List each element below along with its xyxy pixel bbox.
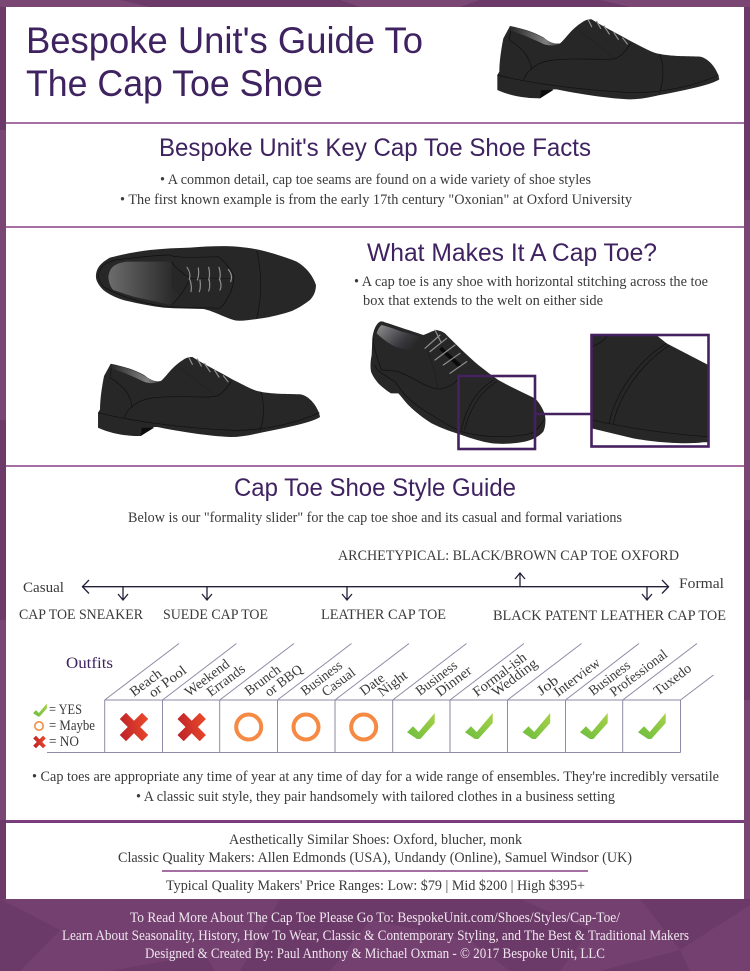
column labels xyxy=(127,647,695,701)
column labels: Tuxedo xyxy=(651,661,695,699)
column labels: Beach xyxy=(127,667,165,700)
column labels: Job xyxy=(534,673,562,699)
text: cap toe definition xyxy=(354,274,708,309)
panel: what makes it a cap toe xyxy=(6,226,744,465)
title: The Cap Toe Shoe xyxy=(26,63,323,104)
text: price ranges: Typical Quality Makers' Price Ranges: Low: $79 | Mid $200 | High $395+ xyxy=(166,878,585,894)
column labels: Wedding xyxy=(489,656,541,700)
icon: magnified toe xyxy=(592,335,708,443)
ratings icons xyxy=(120,713,666,740)
text: cap toe definition: • A cap toe is any shoe with horizontal stitching across the toe xyxy=(354,274,708,290)
text: versatility bullets xyxy=(32,769,719,805)
chart: formality slider: LEATHER CAP TOE xyxy=(321,607,446,623)
text: facts bullets: • The first known example is from the early 17th century "Oxonian" at Oxford University xyxy=(120,192,633,208)
panel: similar shoes and prices xyxy=(6,820,744,899)
column labels: Brunch xyxy=(242,663,284,699)
text: facts bullets xyxy=(120,172,633,208)
column labels: Professional xyxy=(607,647,671,700)
text: similar shoes and makers: Aesthetically Similar Shoes: Oxford, blucher, monk xyxy=(229,832,523,848)
title: Bespoke Unit's Guide To xyxy=(26,20,423,61)
heading: style guide: Cap Toe Shoe Style Guide xyxy=(234,474,516,502)
chart: outfit table xyxy=(47,644,714,752)
column labels: Formal-ish xyxy=(470,650,530,700)
footer: To Read More About The Cap Toe Please Go To: BespokeUnit.com/Shoes/Styles/Cap-Toe/ xyxy=(130,910,621,926)
panel: style guide xyxy=(6,465,744,821)
footer: Learn About Seasonality, History, How To Wear, Classic & Contemporary Styling, and The Best & Traditional Makers xyxy=(62,928,689,944)
text: style guide intro: Below is our "formality slider" for the cap toe shoe and its casual and formal variations xyxy=(128,510,622,526)
panel: key facts xyxy=(6,122,744,226)
column labels: or BBQ xyxy=(262,662,306,700)
text: cap toe definition: box that extends to the welt on either side xyxy=(363,293,603,309)
icon: shoe top view xyxy=(96,246,316,321)
text: versatility bullets: • Cap toes are appropriate any time of year at any time of day for a wide range of ensembles. They're incredibly versatile xyxy=(32,769,719,785)
column labels: Casual xyxy=(319,665,359,700)
chart: formality slider: ARCHETYPICAL: BLACK/BROWN CAP TOE OXFORD xyxy=(338,548,679,564)
column labels: Dinner xyxy=(433,663,475,700)
chart: formality slider: BLACK PATENT LEATHER CAP TOE xyxy=(493,608,726,624)
column labels: or Pool xyxy=(146,663,190,701)
legend: = YES xyxy=(49,702,82,718)
legend: = Maybe xyxy=(49,718,95,734)
column labels: Business xyxy=(586,658,634,699)
title xyxy=(26,20,423,104)
column labels: Business xyxy=(298,658,346,699)
column labels: Errands xyxy=(204,662,249,700)
legend: = NO xyxy=(49,734,79,750)
chart: formality slider: CAP TOE SNEAKER xyxy=(19,607,143,623)
footer: Designed & Created By: Paul Anthony & Michael Oxman - © 2017 Bespoke Unit, LLC xyxy=(145,946,605,962)
icon: shoe three-quarter view xyxy=(371,321,545,444)
chart: formality slider: Casual xyxy=(23,580,64,596)
heading: what makes it a cap toe: What Makes It A Cap Toe? xyxy=(367,239,657,267)
text: similar shoes and makers: Classic Quality Makers: Allen Edmonds (USA), Undandy (Online), Samuel Windsor (UK) xyxy=(118,850,632,866)
chart: formality slider: SUEDE CAP TOE xyxy=(163,607,268,623)
chart: formality slider xyxy=(19,548,726,624)
icon: header shoe side view xyxy=(497,19,719,99)
column labels: Date xyxy=(357,671,388,699)
text: versatility bullets: • A classic suit style, they pair handsomely with tailored clothes in a business setting xyxy=(136,789,615,805)
legend xyxy=(33,702,95,750)
heading: outfits: Outfits xyxy=(66,655,113,672)
text: facts bullets: • A common detail, cap toe seams are found on a wide variety of shoe styles xyxy=(160,172,591,188)
footer xyxy=(62,910,689,962)
callout: magnifier boxes xyxy=(458,335,708,449)
column labels: Weekend xyxy=(182,657,233,700)
icon: shoe side view xyxy=(98,357,320,437)
heading: key facts: Bespoke Unit's Key Cap Toe Shoe Facts xyxy=(159,134,591,162)
column labels: Night xyxy=(375,668,411,700)
text: similar shoes and makers xyxy=(118,832,632,866)
column labels: Interview xyxy=(551,655,604,700)
column labels: Business xyxy=(413,658,461,699)
panel: header xyxy=(6,7,744,122)
chart: formality slider: Formal xyxy=(679,576,724,592)
